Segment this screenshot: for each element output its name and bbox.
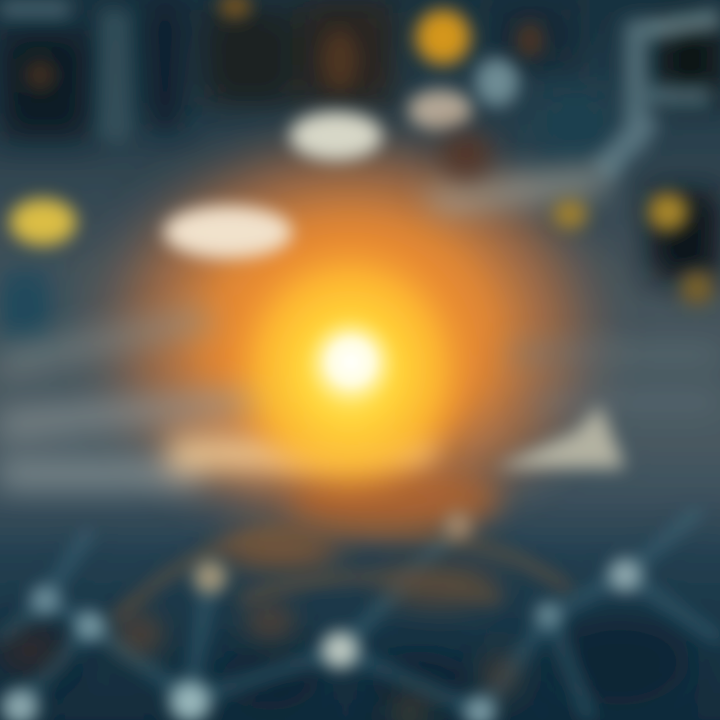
- white hot core: [303, 314, 399, 410]
- highlight: dark knot: [440, 131, 492, 179]
- light: gold top: [416, 10, 470, 64]
- circuit network lines: [0, 510, 720, 720]
- top circuit structures: [0, 0, 720, 340]
- orange halo: [70, 110, 630, 560]
- orange arc traces: [115, 526, 570, 620]
- highlight: large cream blob: [164, 206, 292, 258]
- network nodes: [2, 512, 641, 720]
- highlight: teal blob: [475, 58, 519, 106]
- horizontal light streaks: [0, 165, 720, 490]
- dark bottom blotches: [0, 615, 690, 710]
- highlight: cream peak at right: [495, 405, 625, 468]
- highlight: upper right blob: [408, 90, 472, 130]
- small amber lights: [24, 0, 714, 305]
- light: yellow left: [10, 199, 76, 245]
- warm patches: [0, 532, 518, 720]
- highlight: upper white blob: [290, 112, 382, 160]
- glow spill under the horizon: [290, 468, 500, 532]
- inner yellow glow: [225, 238, 475, 502]
